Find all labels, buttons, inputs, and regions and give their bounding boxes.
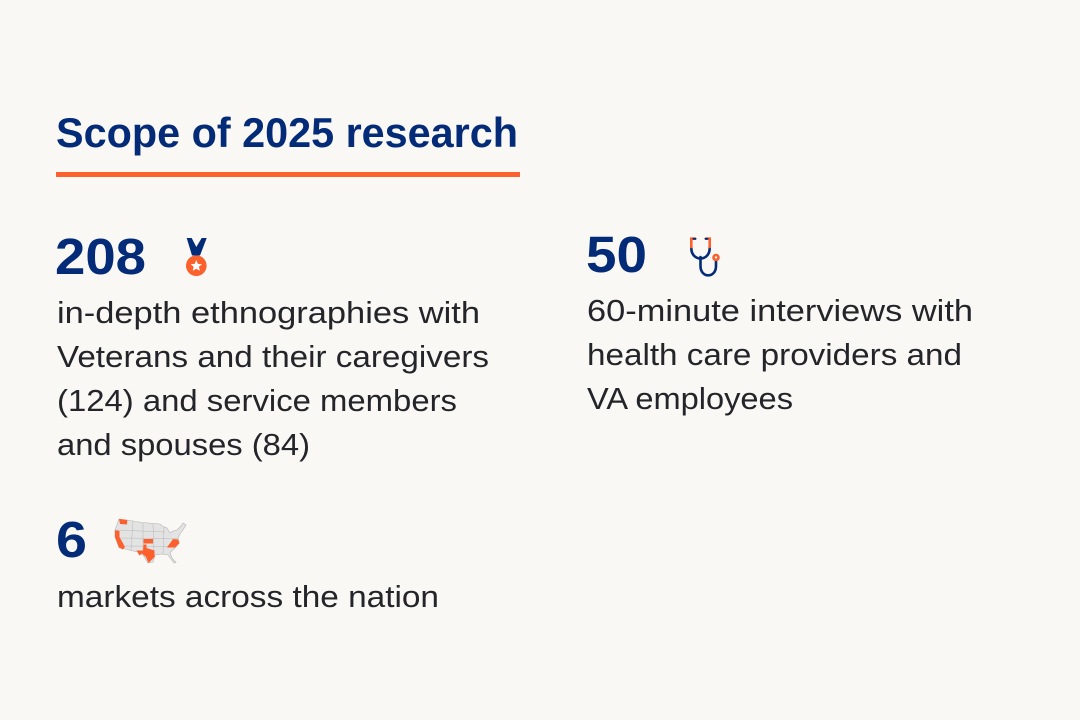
stat: 208: 208: [55, 228, 146, 285]
icon: US map: [115, 519, 186, 563]
text: ethnographies description: [57, 295, 489, 462]
title: Scope of 2025 research: [56, 109, 518, 156]
icon: medal: [186, 238, 207, 276]
text: interviews description: 60-minute interviews with: [587, 293, 973, 328]
stat: 50: 50: [586, 226, 647, 283]
text: interviews description: [587, 293, 973, 416]
panel: 208 ethnographies: [55, 228, 489, 462]
text: ethnographies description: and spouses (84): [57, 427, 310, 462]
text: interviews description: VA employees: [587, 381, 793, 416]
text: ethnographies description: in-depth ethnographies with: [57, 295, 480, 330]
text: ethnographies description: (124) and service members: [57, 383, 457, 418]
text: interviews description: health care providers and: [587, 337, 962, 372]
text: ethnographies description: Veterans and their caregivers: [57, 339, 489, 374]
title: [56, 109, 520, 177]
panel: 50 interviews: [586, 226, 973, 416]
panel: 6 markets: [56, 511, 439, 614]
stat: 6: 6: [56, 511, 87, 568]
text: markets description: markets across the nation: [57, 579, 439, 614]
icon: stethoscope: [691, 239, 718, 275]
